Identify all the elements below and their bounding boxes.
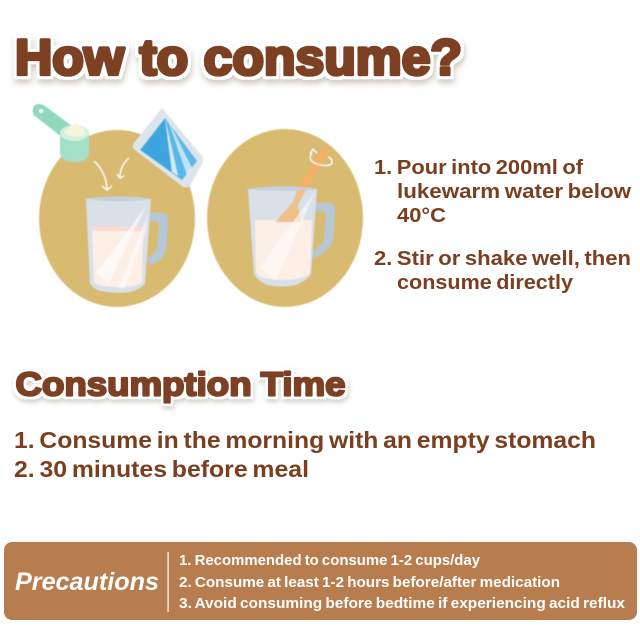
- divider: [168, 552, 169, 612]
- title: How to consume?: [15, 30, 462, 86]
- precautions list: 1. Recommended to consume 1-2 cups/day: [179, 553, 480, 569]
- step 2: consume directly: [397, 271, 574, 294]
- icon: mug rim: [248, 186, 317, 191]
- step 2: 2. Stir or shake well, then: [374, 247, 631, 270]
- icon: light reflection: [259, 192, 315, 280]
- step 1: [374, 156, 631, 227]
- icon: spoon in mug: [275, 190, 306, 222]
- icon: sachet: [133, 108, 203, 188]
- arrow: sachet to mug: [117, 158, 129, 178]
- step 1: lukewarm water below: [397, 180, 631, 203]
- step 1: 1. Pour into 200ml of: [374, 156, 583, 179]
- icon: measuring scoop: [33, 104, 89, 162]
- consumption time list: [14, 427, 596, 482]
- icon: mug with milk: [86, 196, 168, 293]
- panel: precautions: [4, 542, 637, 620]
- precautions list: 2. Consume at least 1-2 hours before/after medication: [179, 575, 560, 591]
- instructions: [374, 156, 631, 294]
- panel background: [4, 542, 637, 620]
- precautions list: 3. Avoid consuming before bedtime if experiencing acid reflux: [179, 596, 625, 612]
- consumption time list: 1. Consume in the morning with an empty stomach: [14, 427, 596, 453]
- precautions label: Precautions: [15, 568, 159, 596]
- arrow: scoop to mug: [94, 161, 112, 190]
- icon: milk: [255, 220, 312, 280]
- consumption time list: 2. 30 minutes before meal: [14, 456, 309, 482]
- step 1: 40°C: [397, 204, 446, 227]
- icon: spoon handle: [296, 148, 329, 190]
- illustration: stir in mug: [207, 129, 363, 307]
- precautions list: [179, 553, 625, 612]
- icon: handle of second mug: [311, 203, 335, 258]
- icon: mug body: [248, 186, 317, 286]
- icon: rotation arrow: [310, 149, 332, 166]
- circle background 1: [39, 130, 195, 307]
- step 2: [374, 247, 631, 294]
- illustration: add powder and sachet to mug: [33, 104, 203, 307]
- circle background 2: [207, 129, 363, 307]
- heading: consumption time: Consumption Time: [16, 366, 346, 402]
